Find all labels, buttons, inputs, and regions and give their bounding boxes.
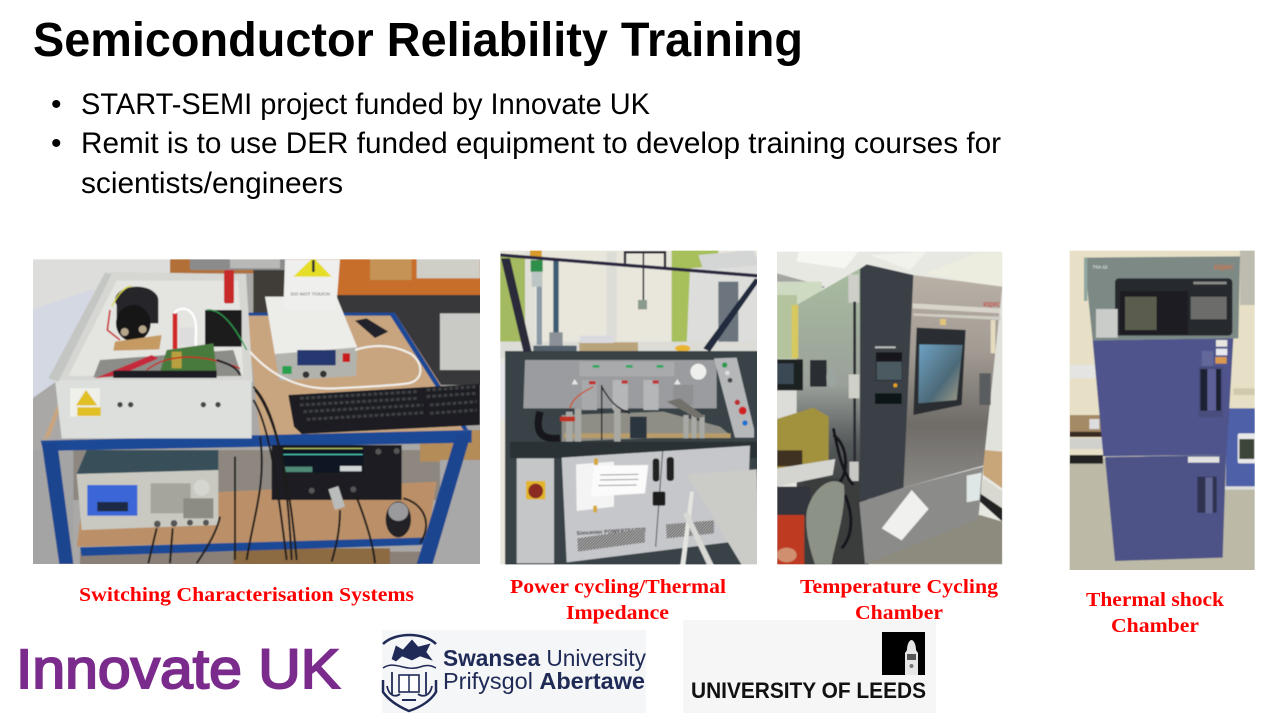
bullet 2 text: Remit is to use DER funded equipment to develop training courses for (81, 127, 1001, 160)
logo: university of leeds: UNIVERSITY OF LEEDS (691, 678, 926, 703)
caption: temperature cycling chamber (800, 576, 998, 624)
caption: power cycling / thermal impedance (510, 576, 726, 624)
logo: swansea university: Prifysgol Abertawe (443, 668, 645, 694)
bullet 1: • (51, 88, 62, 121)
logo: university of leeds (683, 620, 936, 713)
bullet 2 text continued: scientists/engineers (81, 167, 343, 200)
bullet 2: • (51, 127, 62, 160)
bullet list (51, 88, 1001, 200)
sign text: do not touch: DO NOT TOUCH (291, 292, 330, 298)
caption: thermal shock chamber (1086, 589, 1225, 637)
caption: temperature cycling chamber: Temperature Cycling (800, 576, 998, 598)
photo: switching characterisation systems (30, 257, 483, 567)
logo: swansea university: Swansea University (443, 645, 646, 671)
photo: power cycling / thermal impedance tester (497, 248, 765, 568)
caption: power cycling / thermal impedance: Impedance (566, 602, 669, 624)
caption: temperature cycling chamber: Chamber (855, 602, 943, 624)
photo: temperature cycling chamber (773, 248, 1007, 568)
caption: thermal shock chamber: Thermal shock (1086, 589, 1225, 611)
caption: power cycling / thermal impedance: Power cycling/Thermal (510, 576, 726, 598)
bullet 1 text: START-SEMI project funded by Innovate UK (81, 88, 650, 121)
logo text: espec: espec (1214, 263, 1233, 272)
logo: swansea university (382, 630, 646, 713)
caption: thermal shock chamber: Chamber (1111, 615, 1199, 637)
caption: switching characterisation systems: Switching Characterisation Systems (79, 584, 414, 606)
photo: thermal shock chamber (1067, 248, 1260, 575)
icon: swansea shield crest (383, 635, 436, 711)
machine label: simcenter powertester: Simcenter POWERTESTER (576, 527, 646, 537)
icon: leeds tower (905, 640, 918, 675)
logo text: espec: espec (983, 300, 1000, 309)
title: Semiconductor Reliability Training (33, 14, 803, 67)
model label: tsa: TSA-12 (1093, 264, 1108, 269)
logo: innovate uk: Innovate UK (16, 637, 340, 700)
